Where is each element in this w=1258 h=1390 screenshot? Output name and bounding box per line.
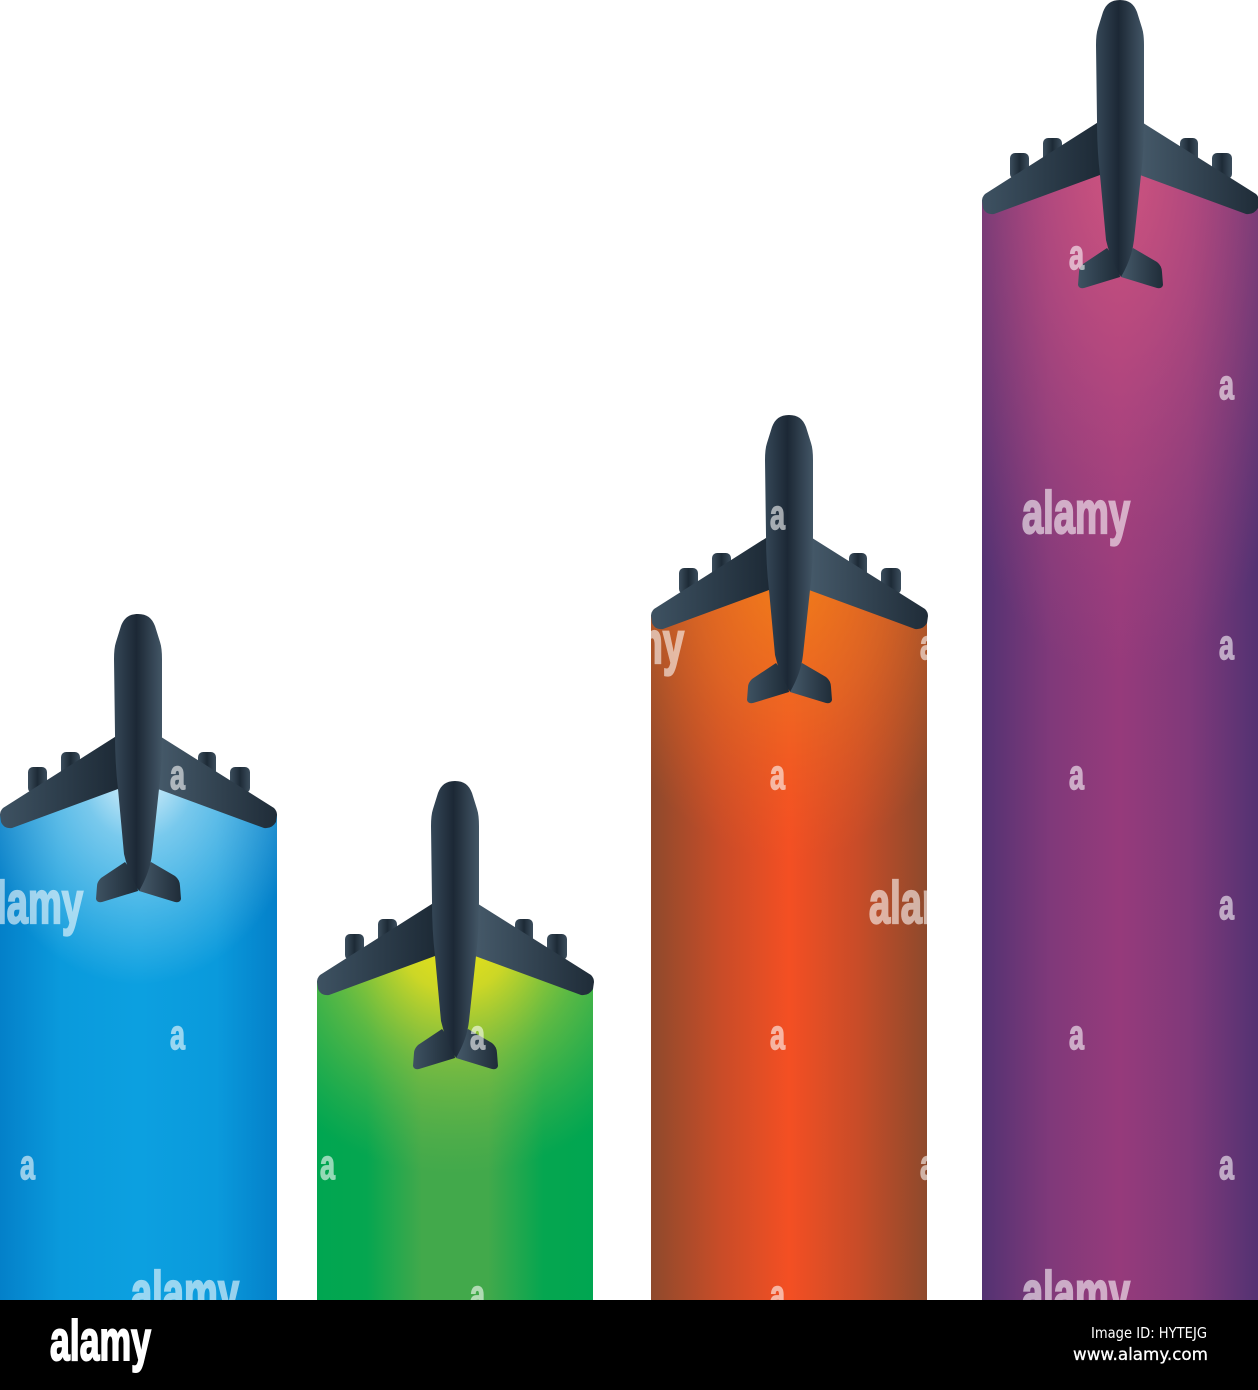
watermark text: alamy bbox=[1022, 480, 1130, 546]
airplane: green bar bbox=[317, 781, 594, 1069]
footer bar bbox=[0, 1300, 1258, 1390]
watermark text: a bbox=[1069, 751, 1084, 798]
watermark text: a bbox=[770, 1011, 785, 1058]
watermark text: a bbox=[1219, 361, 1234, 408]
airplane: purple bar bbox=[982, 0, 1258, 288]
watermark text bbox=[0, 231, 1234, 1326]
watermark text: a bbox=[1069, 231, 1084, 278]
footer logo: alamy bbox=[50, 1309, 151, 1373]
watermark text: a bbox=[770, 751, 785, 798]
bar: purple bbox=[982, 150, 1258, 1300]
watermark text: a bbox=[320, 1141, 335, 1188]
watermark text: a bbox=[170, 751, 185, 798]
watermark text: alamy bbox=[576, 610, 684, 676]
watermark text: a bbox=[1219, 881, 1234, 928]
watermark text: a bbox=[1219, 1141, 1234, 1188]
watermark text: alamy bbox=[1022, 1260, 1130, 1326]
airplane: blue bar bbox=[0, 614, 277, 902]
watermark text: a bbox=[920, 621, 935, 668]
watermark text: alamy bbox=[869, 870, 977, 936]
bar: blue bbox=[0, 764, 277, 1300]
watermark text: a bbox=[770, 1271, 785, 1318]
watermark text: a bbox=[770, 491, 785, 538]
watermark text: a bbox=[20, 1141, 35, 1188]
watermark text: a bbox=[1069, 1011, 1084, 1058]
image id: Image ID: HYTEJG bbox=[1091, 1324, 1207, 1342]
watermark text: a bbox=[470, 1011, 485, 1058]
bar: green bbox=[317, 931, 593, 1300]
watermark text: a bbox=[920, 1141, 935, 1188]
watermark text: a bbox=[170, 1011, 185, 1058]
website: www.alamy.com bbox=[1073, 1345, 1208, 1365]
airplane: orange bar bbox=[651, 415, 928, 703]
bar: orange bbox=[651, 565, 927, 1300]
watermark text: a bbox=[1219, 621, 1234, 668]
watermark text: a bbox=[470, 1271, 485, 1318]
watermark text: alamy bbox=[131, 1260, 239, 1326]
